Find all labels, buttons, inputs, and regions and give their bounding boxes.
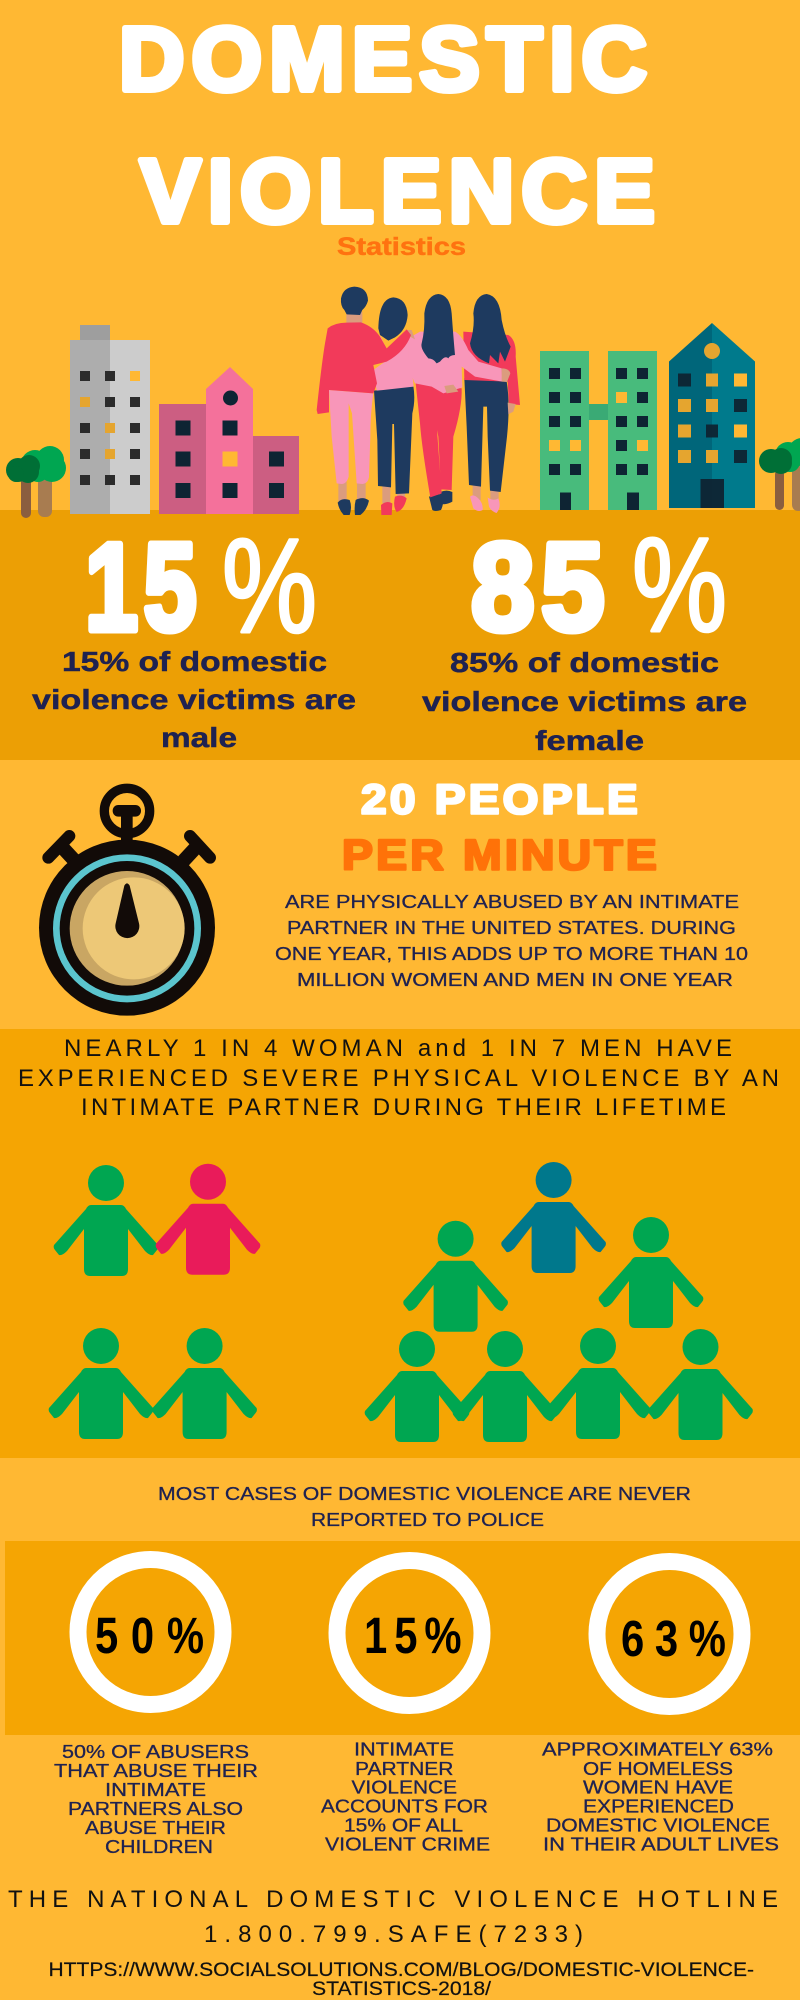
panel: 1 in 4 women, 1 in 7 men [0, 1029, 800, 1458]
caption male: violence victims are [32, 684, 356, 715]
panel: 15 percent male [32, 512, 356, 753]
source url: STATISTICS-2018/ [312, 1979, 492, 2000]
caption male: 15% of domestic [62, 646, 327, 677]
caption female: 85% of domestic [450, 647, 719, 678]
heading text [18, 1035, 779, 1121]
text block: physically abused: MILLION WOMEN AND MEN IN ONE YEAR [297, 969, 733, 990]
caption female: violence victims are [422, 686, 747, 717]
big number 15%: % [222, 512, 317, 661]
heading: 20 people per minute [342, 776, 660, 880]
text block: physically abused: PARTNER IN THE UNITED STATES. DURING [287, 917, 736, 938]
text block: never reported [158, 1483, 691, 1530]
text block: never reported: MOST CASES OF DOMESTIC VIOLENCE ARE NEVER [158, 1483, 691, 1504]
big number 85%: 85 [471, 519, 611, 657]
ring 50%: 50% [95, 1607, 204, 1664]
text block: physically abused: ONE YEAR, THIS ADDS UP TO MORE THAN 10 [275, 943, 748, 964]
ring 15%: 15% [364, 1607, 462, 1664]
caption: intimate partner violence: INTIMATE [354, 1739, 454, 1760]
caption: homeless women: EXPERIENCED [583, 1796, 734, 1817]
icon: stopwatch [39, 788, 215, 1016]
caption: 50% of abusers: THAT ABUSE THEIR [54, 1760, 258, 1781]
big number 15% [85, 512, 317, 661]
caption: homeless women: APPROXIMATELY 63% [542, 1739, 773, 1760]
caption: intimate partner violence: VIOLENCE [352, 1777, 457, 1798]
caption: homeless women: IN THEIR ADULT LIVES [543, 1834, 779, 1855]
big number 85%: % [632, 511, 727, 660]
hotline [8, 1886, 778, 1948]
caption: 50% of abusers: INTIMATE [105, 1779, 206, 1800]
caption female: female [535, 725, 644, 756]
heading text: INTIMATE PARTNER DURING THEIR LIFETIME [81, 1094, 726, 1121]
caption: intimate partner violence: 15% OF ALL [344, 1815, 463, 1836]
caption male: male [161, 722, 237, 753]
caption: homeless women: DOMESTIC VIOLENCE [546, 1815, 770, 1836]
title: DOMESTIC [119, 10, 654, 110]
ground band [0, 510, 800, 760]
caption: homeless women: OF HOMELESS [583, 1758, 733, 1779]
text block: physically abused: ARE PHYSICALLY ABUSED BY AN INTIMATE [285, 891, 739, 912]
heading: 20 people per minute: PER MINUTE [342, 832, 660, 880]
caption: intimate partner violence [321, 1739, 490, 1855]
ring 50% [78, 1560, 223, 1704]
grey tower [70, 325, 150, 514]
caption: 50% of abusers: 50% OF ABUSERS [62, 1741, 249, 1762]
green twin building [540, 351, 657, 510]
ring 63%: 63% [621, 1610, 726, 1667]
caption: 50% of abusers [54, 1741, 258, 1857]
caption female [422, 647, 747, 756]
hotline: THE NATIONAL DOMESTIC VIOLENCE HOTLINE [8, 1886, 778, 1913]
text block: never reported: REPORTED TO POLICE [311, 1509, 544, 1530]
trees right [759, 438, 800, 511]
caption: 50% of abusers: CHILDREN [105, 1836, 213, 1857]
heading: 20 people per minute: 20 PEOPLE [361, 776, 641, 822]
heading text: EXPERIENCED SEVERE PHYSICAL VIOLENCE BY AN [18, 1065, 779, 1092]
ring 63% [597, 1562, 742, 1706]
hotline: 1.800.799.SAFE(7233) [204, 1921, 583, 1948]
icon group: 1 in 7 [365, 1162, 753, 1442]
four friends seen from behind [317, 287, 520, 515]
caption: homeless women: WOMEN HAVE [583, 1777, 733, 1798]
panel: 85 percent female [422, 511, 747, 756]
caption: intimate partner violence: VIOLENT CRIME [325, 1834, 490, 1855]
illustration: city and friends [0, 287, 800, 760]
caption: 50% of abusers: PARTNERS ALSO [68, 1798, 243, 1819]
caption: 50% of abusers: ABUSE THEIR [85, 1817, 226, 1838]
heading text: NEARLY 1 IN 4 WOMAN and 1 IN 7 MEN HAVE [64, 1035, 732, 1062]
ring 15% [337, 1560, 482, 1706]
title [119, 10, 662, 242]
source url: HTTPS://WWW.SOCIALSOLUTIONS.COM/BLOG/DOMESTIC-VIOLENCE- [48, 1960, 754, 1981]
caption: intimate partner violence: ACCOUNTS FOR [321, 1796, 488, 1817]
subtitle: Statistics [337, 233, 466, 261]
caption: intimate partner violence: PARTNER [355, 1758, 454, 1779]
big number 85% [471, 511, 727, 660]
text block: physically abused [275, 891, 748, 990]
big number 15%: 15 [85, 519, 202, 657]
caption male [32, 646, 356, 753]
icon group: 1 in 4 [49, 1164, 260, 1439]
source url [48, 1960, 754, 2000]
trees left [6, 446, 66, 518]
caption: homeless women [542, 1739, 779, 1855]
title: VIOLENCE [140, 142, 662, 242]
pink building [159, 367, 299, 514]
panel: percentage rings [5, 1541, 800, 1735]
teal building [669, 323, 755, 508]
